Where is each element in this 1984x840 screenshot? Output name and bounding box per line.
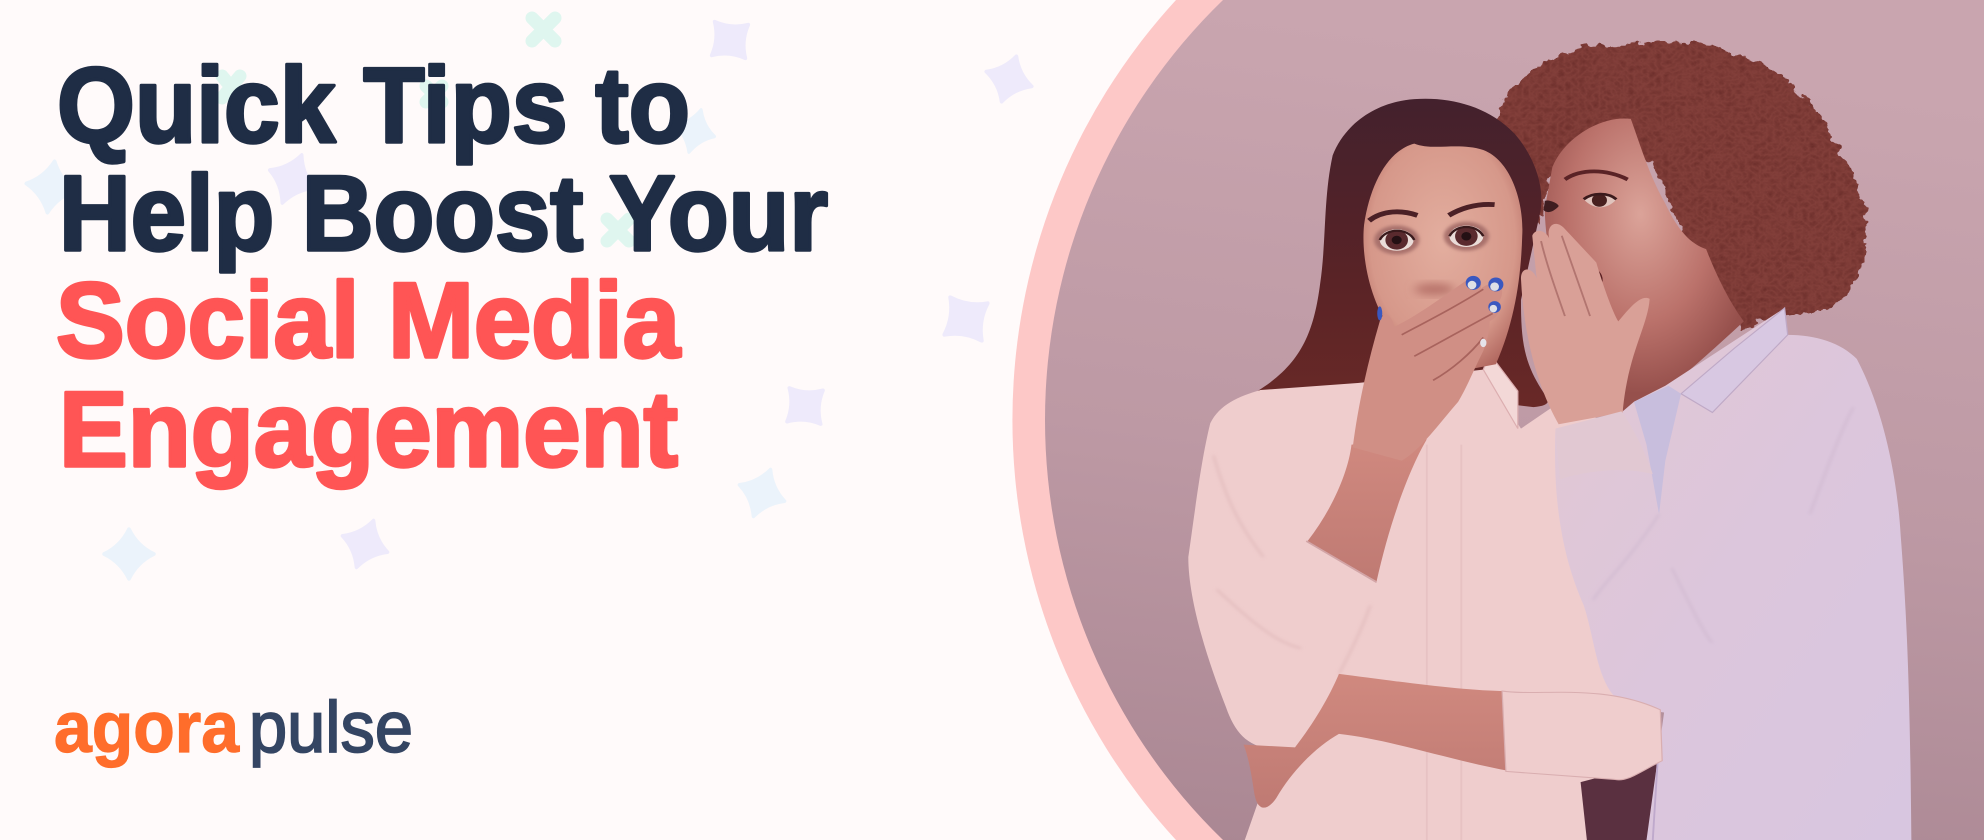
right woman's eyes	[1544, 194, 1616, 212]
decorative stars and crosses	[23, 6, 1039, 579]
left woman's sleeve folds	[1213, 455, 1370, 674]
right woman's shirt button strip	[1653, 718, 1660, 840]
logo word: pulse: pulse	[249, 688, 413, 768]
left woman's raised sleeve cuff edge	[1306, 541, 1377, 582]
left woman's face	[1363, 144, 1522, 375]
title line 1: Quick Tips to	[57, 45, 690, 165]
photo wall background	[1000, 0, 1984, 840]
whispering hand finger lines	[1541, 236, 1590, 316]
right woman's mouth	[1598, 270, 1603, 282]
blue nail polish	[1377, 276, 1503, 347]
left woman's shirt placket	[1427, 445, 1461, 840]
left woman's shirt	[1188, 370, 1614, 840]
right woman's collar	[1681, 308, 1788, 412]
left woman's eyes	[1374, 222, 1489, 254]
left woman's long hair	[1257, 99, 1548, 407]
finger creases	[1402, 289, 1493, 380]
right woman's shirt	[1555, 308, 1911, 840]
left woman's collar	[1483, 354, 1518, 429]
right woman's face and neck	[1544, 119, 1744, 418]
left woman's forearm to mouth	[1308, 439, 1427, 581]
title line 4: Engagement	[59, 369, 678, 489]
logo: agorapulse	[54, 688, 413, 768]
right woman's inner shirt	[1634, 386, 1681, 514]
right woman's eyebrow	[1565, 171, 1628, 179]
left woman's cuff overlapping right sleeve	[1502, 691, 1662, 780]
title	[56, 45, 828, 489]
left woman's nose	[1414, 283, 1454, 295]
right woman's sleeve shading	[1593, 407, 1854, 643]
photo: two women whispering	[1000, 0, 1984, 840]
left woman's crossed forearm and hand	[1244, 674, 1512, 808]
title line 3: Social Media	[56, 260, 681, 380]
pink ring around photo	[1012, 0, 1984, 840]
right woman's sleeve cuff	[1570, 412, 1652, 474]
dark gap between figures	[1580, 764, 1656, 840]
left woman's eyebrows	[1369, 204, 1495, 221]
right woman's curly hair	[1496, 41, 1867, 329]
left woman's hand over mouth	[1353, 276, 1503, 461]
right woman's whispering hand	[1521, 224, 1650, 424]
logo word: agora: agora	[54, 688, 240, 768]
title line 2: Help Boost Your	[59, 153, 828, 273]
